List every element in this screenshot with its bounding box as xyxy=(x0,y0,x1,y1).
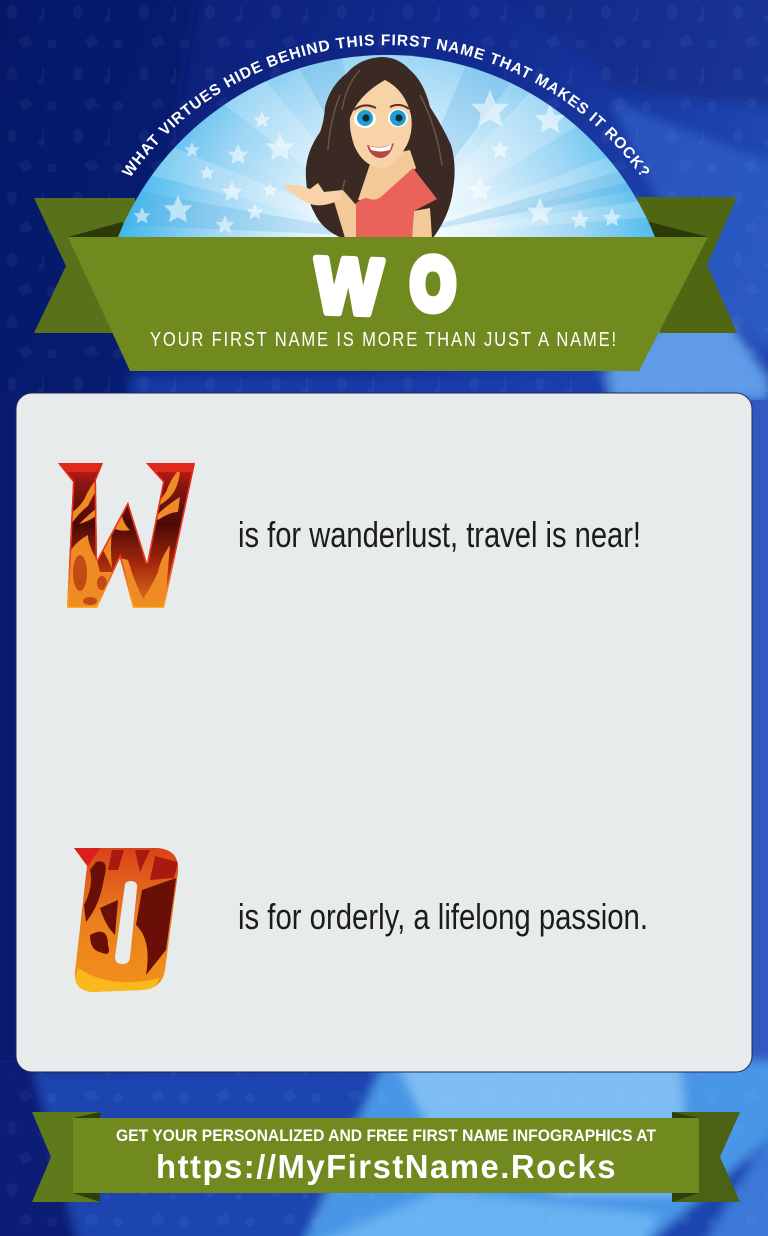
top ribbon xyxy=(68,237,708,371)
mouth xyxy=(367,143,394,158)
footer tails xyxy=(32,1112,100,1202)
top ribbon tails xyxy=(34,197,737,333)
curved heading: WHAT VIRTUES HIDE BEHIND THIS FIRST NAME THAT MAKES IT ROCK? xyxy=(121,34,650,176)
name letters: W xyxy=(313,241,384,331)
character illustration xyxy=(283,57,455,238)
arms and hand xyxy=(333,190,432,238)
hair xyxy=(306,57,455,238)
footer call to action: GET YOUR PERSONALIZED AND FREE FIRST NAME INFOGRAPHICS AT xyxy=(116,1127,656,1145)
fire letter O xyxy=(74,848,178,992)
content panel xyxy=(16,393,752,1072)
neck xyxy=(358,150,416,204)
dome with sunburst and stars xyxy=(118,54,655,237)
text line O: is for orderly, a lifelong passion. xyxy=(238,896,648,937)
eyes xyxy=(354,105,409,128)
footer ribbon xyxy=(32,1112,740,1202)
ribbon tagline: YOUR FIRST NAME IS MORE THAN JUST A NAME! xyxy=(150,329,618,351)
fire letter W xyxy=(58,463,195,608)
ribbon front xyxy=(68,237,708,371)
name letters: O xyxy=(411,245,455,325)
footer front xyxy=(73,1118,699,1193)
footer url: https://MyFirstName.Rocks xyxy=(156,1148,617,1185)
face xyxy=(350,80,412,168)
shirt xyxy=(355,168,437,238)
text line W: is for wanderlust, travel is near! xyxy=(238,514,641,555)
name letters xyxy=(313,241,455,331)
